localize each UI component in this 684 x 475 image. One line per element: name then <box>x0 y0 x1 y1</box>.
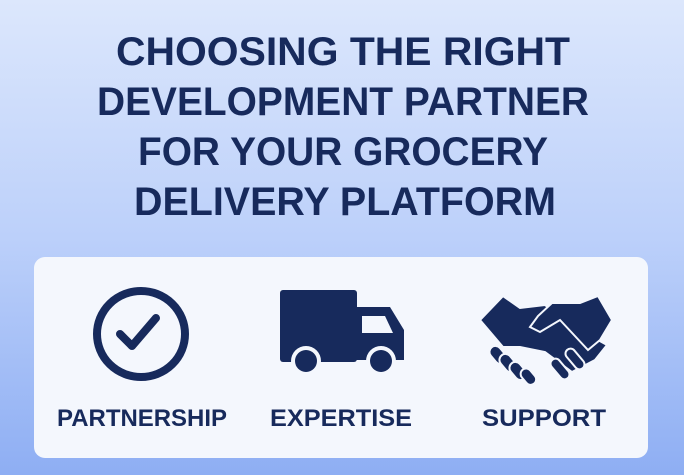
labels: EXPERTISE <box>270 405 412 432</box>
labels: PARTNERSHIP <box>57 405 227 432</box>
title: DELIVERY PLATFORM <box>134 180 556 224</box>
title: DEVELOPMENT PARTNER <box>97 80 589 124</box>
labels: SUPPORT <box>482 405 606 432</box>
title: FOR YOUR GROCERY <box>138 130 548 174</box>
panel: features card <box>34 257 648 458</box>
labels <box>57 405 606 432</box>
icon: handshake <box>480 296 612 387</box>
title <box>97 30 589 224</box>
icon: delivery truck <box>280 290 404 376</box>
icon: check circle <box>97 291 185 377</box>
title: CHOOSING THE RIGHT <box>116 30 570 74</box>
